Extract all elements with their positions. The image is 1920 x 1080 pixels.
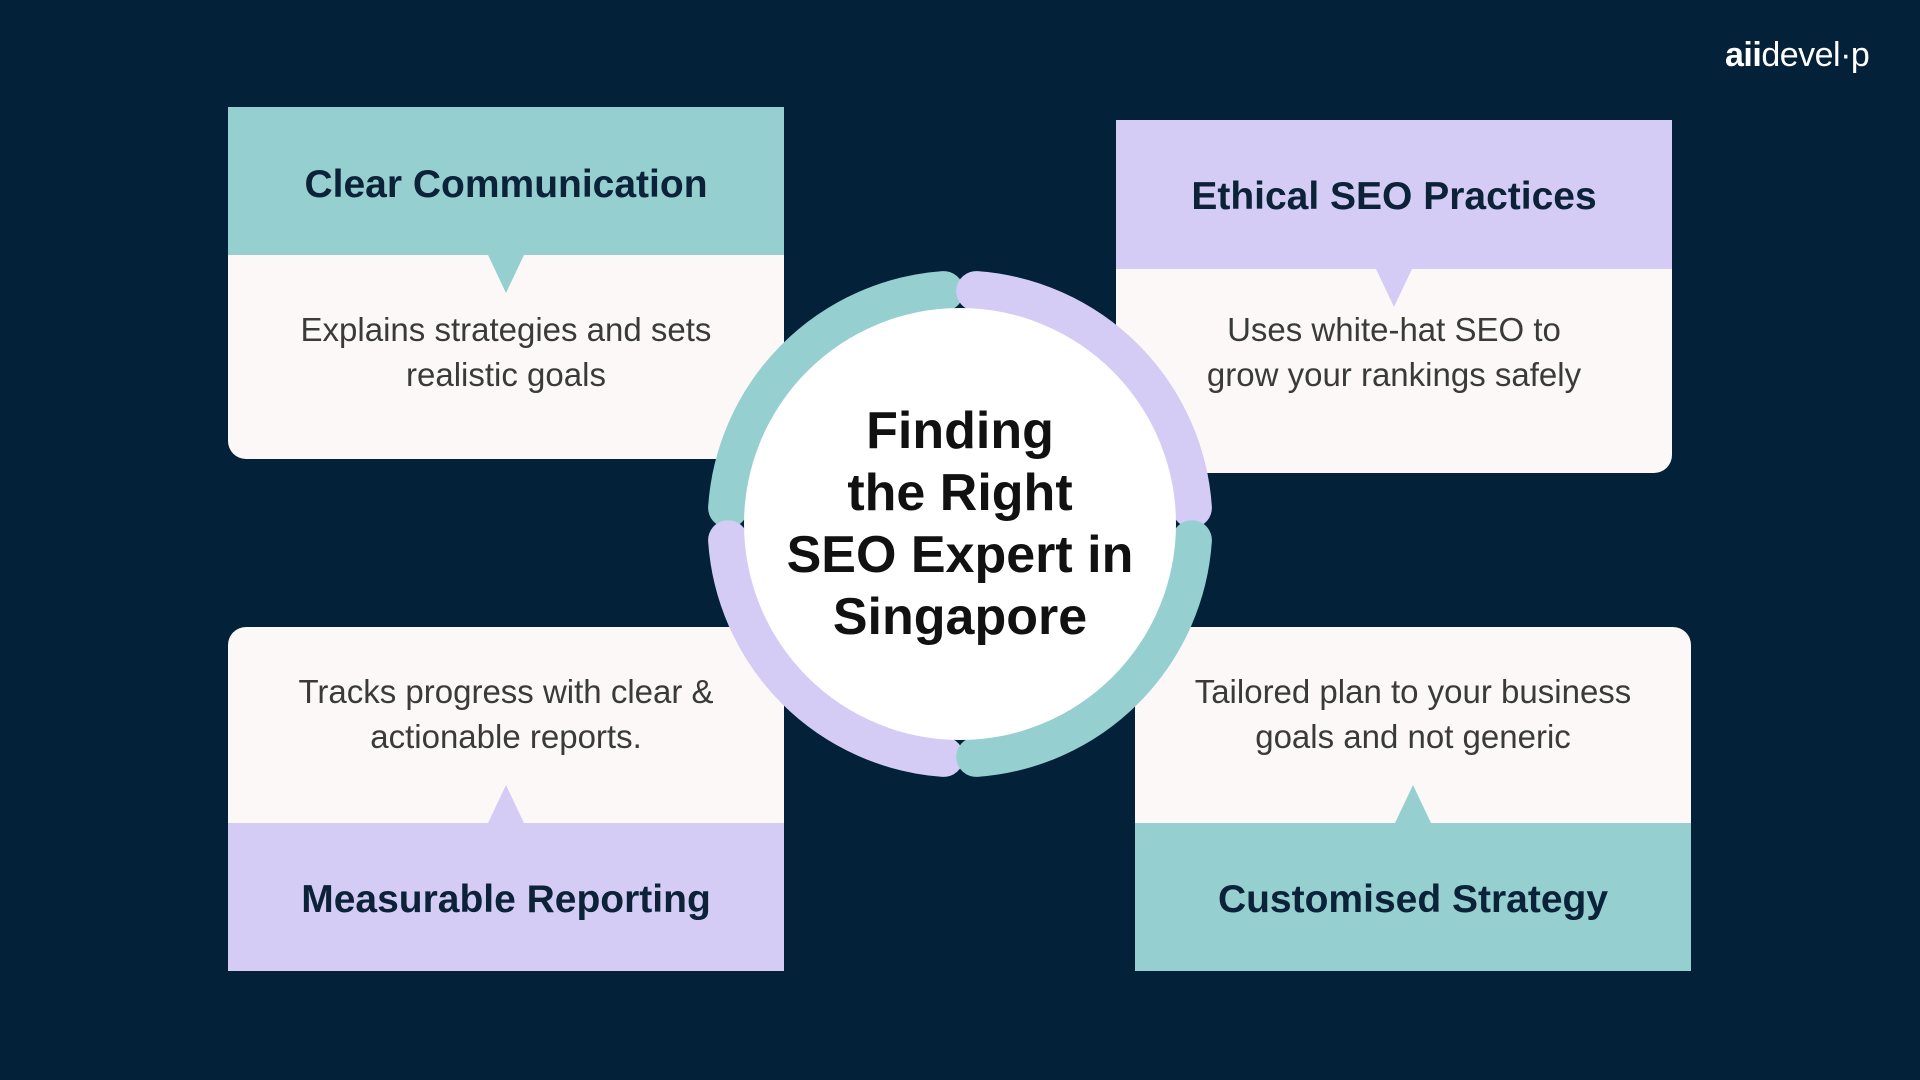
panel: measurable reporting: Tracks progress with clear & (298, 673, 714, 710)
panel: ethical seo (1116, 120, 1672, 473)
panel: ethical seo: grow your rankings safely (1207, 356, 1581, 393)
panel: measurable reporting: actionable reports. (370, 718, 642, 755)
title: the Right (847, 464, 1073, 522)
panel: customised strategy: Tailored plan to your business (1195, 673, 1631, 710)
heading: Clear Communication (304, 163, 708, 206)
panel: customised strategy: goals and not generic (1255, 718, 1571, 755)
heading: Ethical SEO Practices (1191, 174, 1597, 218)
title: Finding (866, 402, 1054, 460)
panel: clear communication (228, 107, 784, 459)
panel: clear communication: realistic goals (406, 356, 606, 393)
panel: ethical seo: Uses white-hat SEO to (1227, 311, 1561, 348)
heading (1135, 823, 1691, 971)
title: SEO Expert in (787, 526, 1133, 584)
title (787, 402, 1133, 646)
title: Singapore (833, 588, 1087, 646)
heading (1116, 120, 1672, 269)
heading (228, 823, 784, 971)
panel: clear communication: Explains strategies and sets (301, 311, 711, 348)
heading: Measurable Reporting (301, 878, 711, 921)
heading (228, 107, 784, 255)
panel: customised strategy (1135, 627, 1691, 971)
heading: Customised Strategy (1218, 878, 1608, 921)
logo: aiidevel·p (1725, 36, 1869, 74)
panel: measurable reporting (228, 627, 784, 971)
